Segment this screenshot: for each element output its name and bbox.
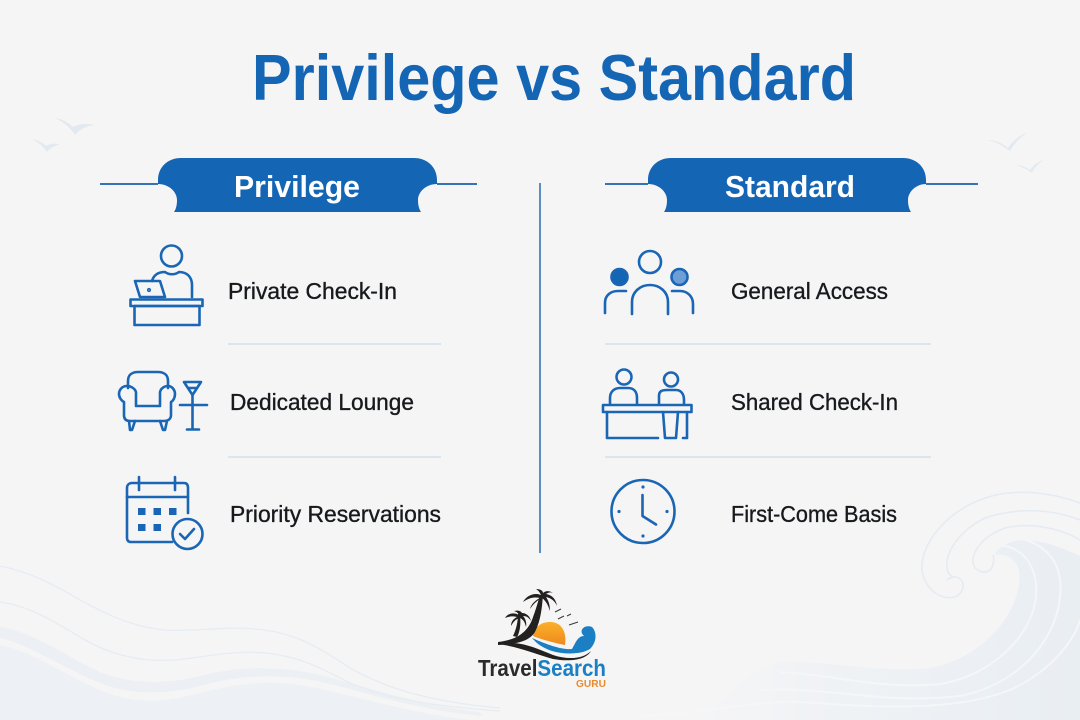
title: Privilege vs Standard (252, 41, 856, 114)
center divider (539, 183, 541, 553)
header ribbon: privilege: Privilege (234, 169, 360, 204)
logo sub-wordmark: GURU (576, 679, 606, 690)
decorative birds left (32, 118, 95, 152)
background waves (0, 492, 1080, 720)
logo: TravelSearch Guru (478, 589, 606, 690)
row: private check-in (130, 246, 397, 325)
divider (228, 344, 441, 457)
decorative birds right (988, 132, 1044, 173)
logo birds (555, 609, 578, 625)
divider (605, 344, 931, 457)
row: shared check-in (603, 370, 898, 438)
label: Dedicated Lounge (230, 389, 414, 415)
label: General Access (731, 278, 888, 304)
header ribbon: privilege (100, 158, 477, 212)
row: general access (605, 251, 888, 314)
icon: group of three people (605, 251, 693, 314)
logo sun (533, 622, 565, 645)
logo shoreline (498, 643, 591, 660)
icon: person at desk with laptop (130, 246, 202, 325)
panel: privilege (100, 158, 477, 549)
row: first-come basis (612, 480, 897, 543)
icon: calendar with check (127, 477, 202, 549)
label: Priority Reservations (230, 501, 441, 527)
logo palm trees (498, 589, 557, 645)
label: First-Come Basis (731, 501, 897, 527)
logo wordmark: TravelSearch (478, 655, 606, 681)
logo wave (532, 626, 596, 653)
row: dedicated lounge (119, 372, 414, 430)
panel: standard (603, 158, 978, 543)
icon: clock (612, 480, 674, 543)
icon: two people at shared desk (603, 370, 692, 438)
label: Shared Check-In (731, 389, 898, 415)
row: priority reservations (127, 477, 441, 549)
label: Private Check-In (228, 278, 397, 304)
header ribbon: standard: Standard (725, 169, 855, 204)
icon: armchair and cocktail table (119, 372, 207, 430)
header ribbon: standard (605, 158, 978, 212)
